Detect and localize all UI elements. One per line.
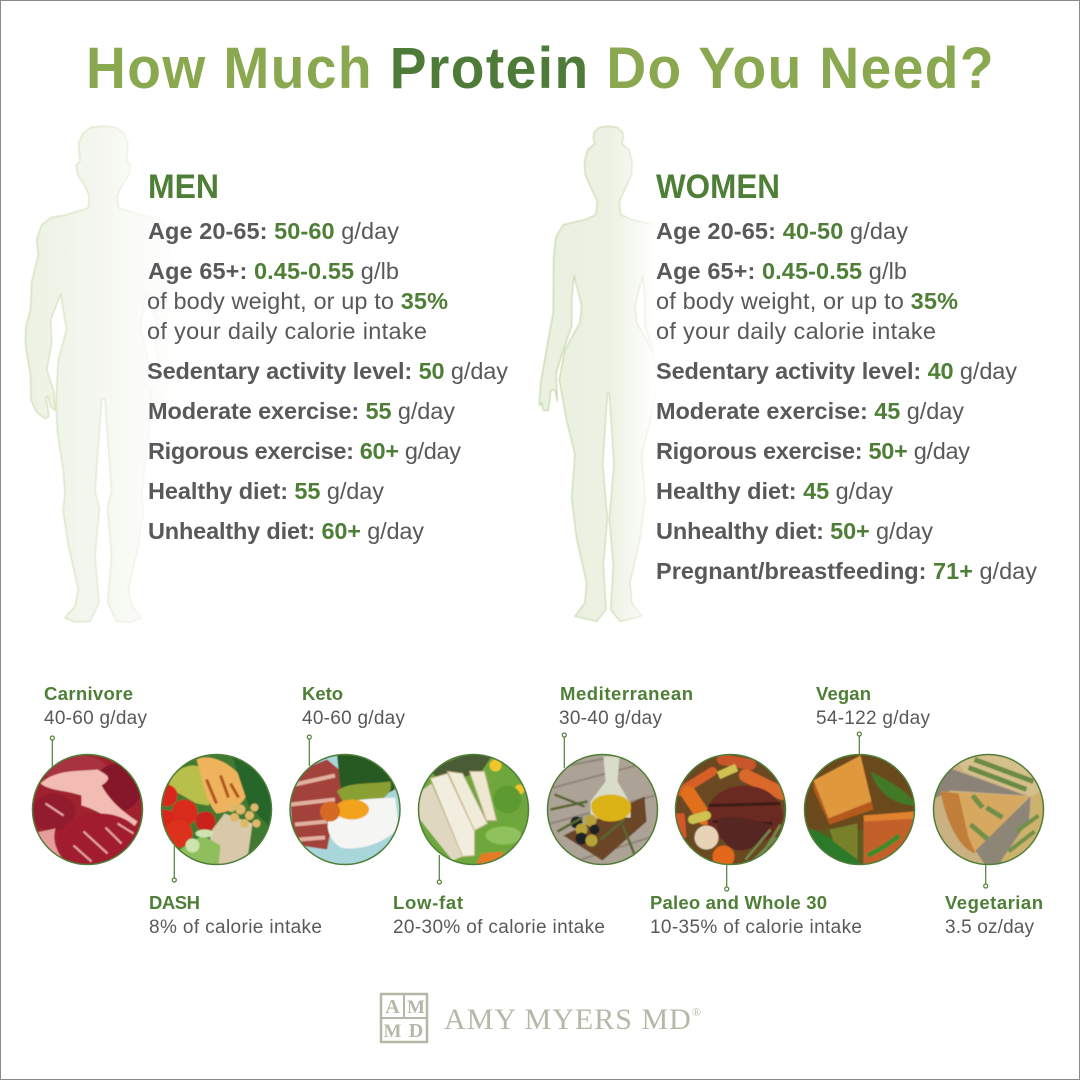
heading: women: WOMEN	[656, 168, 780, 206]
diet label: Carnivore: 40-60 g/day	[44, 708, 148, 729]
logo mark: M	[407, 997, 425, 1018]
protein list: women: Moderate exercise: 45 g/day	[656, 398, 964, 424]
food photo: low-fat chicken salad	[418, 754, 530, 866]
protein list: men: Age 65+: 0.45-0.55 g/lb	[148, 258, 399, 284]
connector lines	[50, 732, 988, 891]
panel: men	[25, 126, 508, 622]
food photo: olive oil and olives	[546, 754, 658, 866]
title: How Much Protein Do You Need?	[86, 36, 995, 101]
protein list: women: Pregnant/breastfeeding: 71+ g/day	[656, 558, 1037, 584]
food photo: DASH bowl	[162, 755, 271, 864]
diet label: Keto: Keto	[302, 683, 343, 704]
protein list: women	[656, 218, 1037, 584]
food photo: vegetarian quiche	[932, 754, 1044, 866]
icon: female body silhouette	[539, 126, 677, 621]
protein list: women: Age 20-65: 40-50 g/day	[656, 218, 908, 244]
diet label: Paleo and Whole 30: 10-35% of calorie intake	[650, 917, 862, 938]
icon: male body silhouette	[25, 126, 181, 622]
protein list: men: Rigorous exercise: 60+ g/day	[148, 438, 461, 464]
circle outlines	[32, 754, 1044, 864]
protein list: men: Healthy diet: 55 g/day	[148, 478, 384, 504]
diet label: DASH: 8% of calorie intake	[149, 917, 322, 938]
diet label: Mediterranean: Mediterranean	[560, 683, 693, 704]
diet label: DASH	[149, 892, 322, 938]
protein list: women: Healthy diet: 45 g/day	[656, 478, 893, 504]
protein list: women: Unhealthy diet: 50+ g/day	[656, 518, 933, 544]
protein list: women: of your daily calorie intake	[656, 318, 936, 344]
logo: Amy Myers MD	[381, 994, 701, 1042]
protein list: women: Rigorous exercise: 50+ g/day	[656, 438, 970, 464]
protein list: men: of your daily calorie intake	[147, 318, 427, 344]
food photo: keto bacon and egg	[289, 754, 401, 866]
food photo: paleo roast with vegetables	[674, 754, 786, 868]
logo wordmark: AMY MYERS MD	[444, 1003, 691, 1036]
diet label: Vegetarian: 3.5 oz/day	[945, 917, 1034, 938]
logo mark: A	[385, 996, 400, 1018]
protein list: women: of body weight, or up to 35%	[656, 288, 958, 314]
logo mark	[381, 994, 427, 1042]
logo wordmark: ®	[692, 1005, 701, 1019]
diet label: Mediterranean	[559, 683, 693, 729]
diet label: Vegan	[816, 683, 930, 729]
diet label: Vegan: 54-122 g/day	[816, 708, 930, 729]
diet label: Keto: 40-60 g/day	[302, 708, 406, 729]
protein list: men: Sedentary activity level: 50 g/day	[147, 358, 508, 384]
protein list: men: Age 20-65: 50-60 g/day	[148, 218, 399, 244]
protein list: men: Unhealthy diet: 60+ g/day	[148, 518, 424, 544]
logo mark: M	[384, 1021, 402, 1042]
diet label: Carnivore: Carnivore	[44, 683, 133, 704]
protein list: women: Sedentary activity level: 40 g/day	[656, 358, 1017, 384]
diet label: Low-fat: 20-30% of calorie intake	[393, 917, 605, 938]
diet label: Vegetarian	[945, 892, 1043, 938]
diet label: Keto	[302, 683, 406, 729]
diet label: Carnivore	[44, 683, 148, 729]
protein list: men	[147, 218, 508, 544]
diet label: Vegan: Vegan	[816, 683, 871, 704]
diet label: Mediterranean: 30-40 g/day	[559, 708, 662, 729]
diet label: Paleo and Whole 30: Paleo and Whole 30	[650, 892, 827, 913]
protein list: men: of body weight, or up to 35%	[147, 288, 448, 314]
diet label: DASH: DASH	[149, 892, 200, 913]
diet label: Paleo and Whole 30	[650, 892, 862, 938]
panel: women	[539, 126, 1037, 621]
diet label: Vegetarian: Vegetarian	[945, 892, 1043, 913]
protein list: men: Moderate exercise: 55 g/day	[148, 398, 455, 424]
diet label: Low-fat: Low-fat	[393, 892, 463, 913]
logo mark: D	[409, 1020, 423, 1042]
panel: diets	[32, 683, 1044, 938]
diet label: Low-fat	[393, 892, 605, 938]
food photo: raw beef	[32, 754, 144, 870]
protein list: women: Age 65+: 0.45-0.55 g/lb	[656, 258, 907, 284]
food photo: vegan tofu and greens	[804, 754, 916, 866]
heading: men: MEN	[148, 168, 219, 206]
